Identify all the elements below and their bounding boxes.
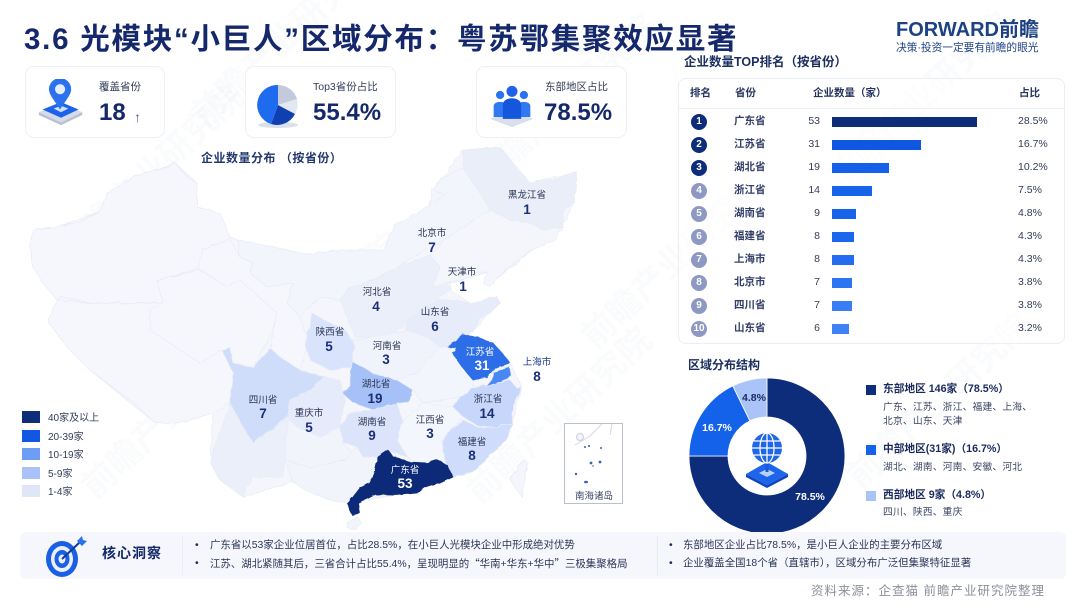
inset: South China Sea islands	[564, 424, 622, 504]
insights right: 东部地区企业占比78.5%，是小巨人企业的主要分布区域	[683, 540, 942, 551]
map labels: 7	[428, 240, 436, 255]
province: Henan	[353, 330, 440, 380]
row 6: 6	[696, 231, 702, 242]
row 1: 53	[808, 115, 820, 127]
row 4: 浙江省	[734, 184, 766, 196]
row 4: 4	[696, 185, 702, 196]
icon: pie	[257, 85, 298, 128]
region legend: east: 北京、山东、天津	[883, 416, 963, 427]
row 10: 3.2%	[1018, 322, 1042, 334]
row 6: 4.3%	[1018, 230, 1042, 242]
ranking table: 省份	[735, 87, 756, 99]
map labels: 3	[382, 352, 390, 367]
map labels: 3	[426, 426, 434, 441]
region legend: east: 广东、江苏、浙江、福建、上海、	[883, 402, 1032, 413]
legend: 40家及以上	[48, 411, 99, 424]
map labels: 陕西省	[316, 326, 344, 338]
ranking table	[678, 78, 1065, 344]
row 2: 2	[696, 139, 702, 150]
row 8: 7	[814, 276, 820, 288]
map labels: 浙江省	[474, 393, 502, 405]
insights left: •	[195, 540, 199, 551]
row 4	[691, 183, 1042, 199]
province: Yunnan	[210, 403, 297, 497]
map heading: 企业数量分布 （按省份）	[201, 151, 342, 165]
map labels: 53	[397, 476, 413, 491]
logo: 决策·投资一定要有前瞻的眼光	[896, 42, 1038, 54]
province: Hebei	[340, 255, 450, 337]
row 9: 9	[696, 300, 702, 311]
province: Hainan	[348, 517, 362, 530]
map labels: 7	[259, 406, 267, 421]
icon: target	[46, 536, 87, 577]
map labels	[249, 189, 552, 491]
map labels: 湖南省	[358, 416, 386, 428]
label: Top3省份占比	[313, 81, 378, 93]
province: Guizhou	[285, 417, 350, 468]
map labels: 8	[533, 369, 541, 384]
ranking table: 占比	[1019, 87, 1040, 99]
stat card: top3 share	[245, 66, 396, 138]
province: Sichuan	[222, 347, 325, 443]
row 5: 5	[696, 208, 702, 219]
map labels: 8	[468, 448, 476, 463]
value: 78.5%	[544, 99, 612, 126]
row 8: 8	[696, 277, 702, 288]
row 2: 16.7%	[1018, 138, 1048, 150]
stat card: east share	[476, 66, 627, 138]
province: Hubei	[342, 362, 413, 410]
text: 前瞻产业研究院	[75, 316, 275, 506]
row 7: 上海市	[734, 253, 766, 265]
text: 前瞻产业研究院	[465, 8, 665, 198]
map labels: 9	[368, 428, 376, 443]
map labels: 5	[305, 420, 313, 435]
insights left: 江苏、湖北紧随其后，三省合计占比55.4%，呈现明显的“华南+华东+华中”三极集聚格局	[210, 556, 628, 571]
map labels: 1	[523, 202, 531, 217]
donut chart: 16.7%	[702, 422, 733, 434]
province: Zhejiang	[453, 380, 522, 427]
row 3: 湖北省	[734, 161, 766, 173]
arrow: ↑	[134, 109, 141, 125]
map labels: 5	[325, 339, 333, 354]
row 9: 3.8%	[1018, 299, 1042, 311]
region legend: west: 四川、陕西、重庆	[883, 507, 963, 518]
legend: 1-4家	[48, 485, 72, 498]
province: Hunan	[340, 403, 407, 457]
value: 18	[99, 99, 126, 126]
map labels: 河北省	[363, 286, 391, 298]
map labels: 江西省	[416, 414, 444, 426]
row 10: 山东省	[734, 322, 766, 334]
row 8	[691, 275, 1042, 291]
insights left: •	[195, 558, 199, 569]
legend	[22, 411, 99, 498]
row 3: 19	[808, 161, 820, 173]
province: Qinghai	[150, 270, 277, 367]
row 7: 4.3%	[1018, 253, 1042, 265]
ranking table: 排名	[690, 87, 711, 99]
row 7: 8	[814, 253, 820, 265]
region legend: west	[866, 488, 991, 518]
map labels: 4	[372, 299, 380, 314]
value: 55.4%	[313, 99, 381, 126]
row 1: 1	[696, 116, 702, 127]
row 8: 北京市	[734, 276, 766, 288]
row 7	[691, 252, 1042, 268]
icon: map pin	[38, 79, 82, 125]
text: 前瞻产业研究院	[840, 306, 1040, 496]
stat card: covered provinces	[25, 66, 165, 138]
province: Inner Mongolia	[238, 168, 490, 317]
map labels: 北京市	[418, 227, 447, 239]
province: Jiangxi	[397, 403, 463, 463]
map labels: 天津市	[448, 266, 477, 278]
region legend: central	[866, 442, 1022, 473]
donut chart: 4.8%	[742, 392, 767, 404]
row 9: 7	[814, 299, 820, 311]
legend: 5-9家	[48, 467, 72, 480]
heading: 核心洞察	[102, 545, 162, 561]
legend: 10-19家	[48, 448, 84, 461]
source note: 资料来源：企查猫 前瞻产业研究院整理	[811, 584, 1045, 598]
donut chart	[689, 378, 845, 532]
insights left	[195, 539, 628, 571]
map labels: 6	[431, 319, 439, 334]
map labels: 湖北省	[362, 378, 390, 390]
icon: people	[490, 86, 533, 127]
province: Fujian	[442, 420, 512, 477]
row 5	[691, 206, 1042, 222]
map labels: 上海市	[523, 356, 552, 368]
map	[22, 146, 623, 530]
text: 前瞻产业研究院	[820, 6, 1020, 196]
province: Anhui	[397, 347, 473, 403]
row 2: 江苏省	[734, 138, 766, 150]
row 5: 4.8%	[1018, 207, 1042, 219]
map labels: 福建省	[458, 436, 486, 448]
province: Guangxi	[285, 447, 378, 503]
row 6	[691, 229, 1042, 245]
row 5: 9	[814, 207, 820, 219]
text: 前瞻产业研究院	[210, 226, 410, 416]
legend: 20-39家	[48, 430, 84, 443]
region heading: 区域分布结构	[688, 358, 760, 372]
row 7: 7	[696, 254, 702, 265]
region legend: east	[866, 382, 1032, 427]
province: Xinjiang	[30, 163, 240, 303]
row 4: 14	[808, 184, 820, 196]
insights left: 广东省以53家企业位居首位，占比28.5%，在小巨人光模块企业中形成绝对优势	[210, 540, 575, 551]
insights right: 企业覆盖全国18个省（直辖市），区域分布广泛但集聚特征显著	[683, 558, 971, 569]
row 2	[691, 137, 1048, 153]
row 9: 四川省	[734, 299, 766, 311]
province: Tibet	[48, 300, 233, 423]
row 3: 10.2%	[1018, 161, 1048, 173]
map labels: 河南省	[373, 340, 401, 352]
province: Chongqing	[288, 377, 345, 437]
table heading: 企业数量TOP排名（按省份）	[684, 55, 847, 69]
icon: globe	[746, 433, 788, 488]
province: Jilin and Liaoning	[430, 210, 563, 287]
donut chart: 78.5%	[795, 491, 826, 503]
row 3: 3	[696, 162, 702, 173]
row 2: 31	[808, 138, 820, 150]
text: 前瞻产业研究院	[52, 78, 252, 268]
logo	[896, 18, 1039, 54]
insight panel	[20, 532, 1066, 579]
logo: FORWARD前瞻	[896, 19, 1039, 41]
province: Shanghai	[485, 367, 512, 387]
row 10: 6	[814, 322, 820, 334]
province: Heilongjiang	[463, 147, 577, 230]
province: Taiwan	[510, 460, 528, 497]
map labels: 重庆市	[295, 407, 324, 419]
row 9	[691, 298, 1042, 314]
map labels: 四川省	[249, 394, 277, 406]
row 1: 28.5%	[1018, 115, 1048, 127]
row 3	[691, 160, 1048, 176]
map labels: 14	[479, 406, 495, 421]
map labels: 江苏省	[466, 346, 494, 358]
row 1: 广东省	[734, 115, 766, 127]
map labels: 黑龙江省	[508, 189, 546, 201]
ranking table: 企业数量（家）	[813, 87, 886, 99]
row 6: 福建省	[734, 230, 766, 242]
province: Jiangsu	[448, 335, 510, 380]
text: 前瞻产业研究院	[460, 321, 660, 511]
row 10	[691, 321, 1042, 337]
row 8: 3.8%	[1018, 276, 1042, 288]
title: 3.6 光模块“小巨人”区域分布：粤苏鄂集聚效应显著	[24, 23, 738, 56]
region legend: central: 中部地区(31家)（16.7%）	[883, 443, 1007, 455]
insights right	[669, 539, 971, 569]
province: Guangdong	[347, 450, 453, 515]
label: 覆盖省份	[99, 81, 141, 93]
map labels: 广东省	[391, 464, 419, 476]
label: 东部地区占比	[545, 81, 608, 93]
text: 前瞻产业研究院	[575, 166, 775, 356]
region legend: west: 西部地区 9家（4.8%）	[883, 489, 991, 501]
map labels: 1	[459, 279, 467, 294]
row 6: 8	[814, 230, 820, 242]
province: Shaanxi	[305, 313, 355, 370]
province: Gansu	[198, 238, 308, 370]
insights right: •	[669, 540, 673, 551]
map labels: 31	[474, 358, 490, 373]
region legend: east: 东部地区 146家（78.5%）	[883, 383, 1009, 395]
province: Shandong	[405, 297, 500, 347]
row 1	[691, 114, 1048, 130]
china silhouette	[30, 147, 577, 503]
region legend: central: 湖北、湖南、河南、安徽、河北	[883, 462, 1022, 473]
map labels: 19	[367, 391, 383, 406]
insights right: •	[669, 558, 673, 569]
inset: South China Sea islands: 南海诸岛	[575, 490, 613, 502]
row 4: 7.5%	[1018, 184, 1042, 196]
row 10: 10	[693, 323, 705, 334]
map labels: 山东省	[421, 306, 449, 318]
row 5: 湖南省	[734, 207, 766, 219]
